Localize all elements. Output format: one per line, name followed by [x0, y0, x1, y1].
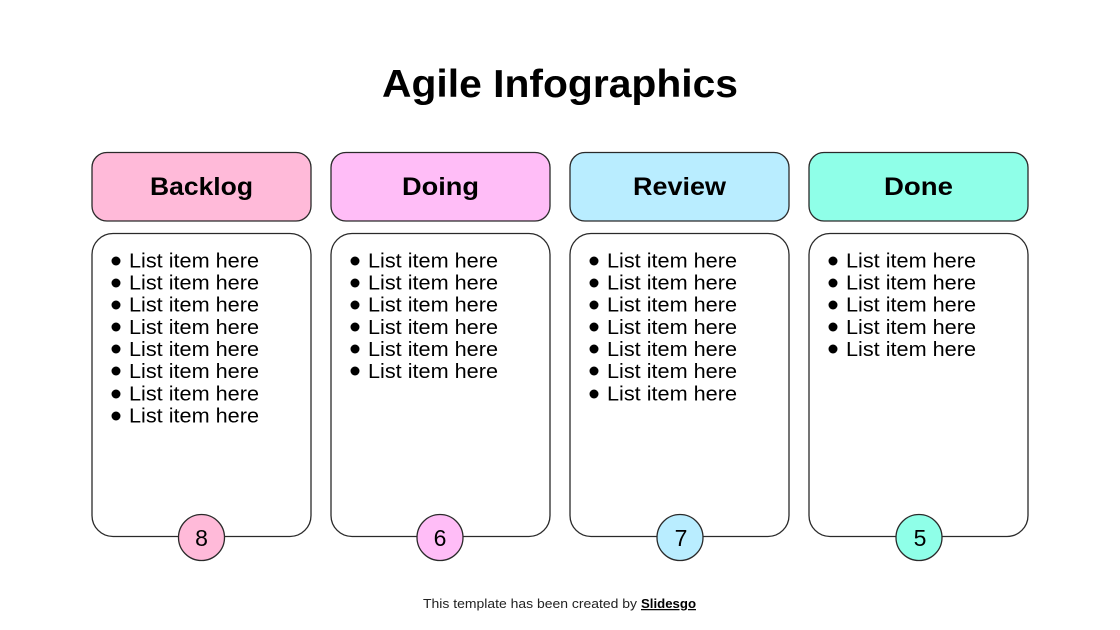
- card: doing list: List item here: [368, 273, 498, 295]
- card: doing list: [331, 234, 550, 536]
- header: backlog: [92, 152, 311, 221]
- card: doing list: List item here: [368, 339, 498, 361]
- card: doing list: List item here: [368, 295, 498, 317]
- count badge: 6: [417, 514, 463, 560]
- header: done: Done: [884, 173, 953, 201]
- card: backlog list: List item here: [129, 383, 259, 405]
- title: Agile Infographics: [382, 63, 738, 106]
- panel: backlog: [92, 152, 311, 560]
- card: done list: List item here: [846, 317, 976, 339]
- card: done list: [809, 234, 1028, 536]
- panel: doing: [331, 152, 550, 560]
- card: done list: List item here: [846, 339, 976, 361]
- header: review: Review: [633, 173, 727, 201]
- count badge: 6: 6: [434, 525, 446, 551]
- header: backlog: Backlog: [150, 173, 253, 201]
- card: doing list: List item here: [368, 250, 498, 272]
- count badge: 7: [657, 514, 703, 560]
- count badge: 7: 7: [675, 525, 687, 551]
- card: review list: List item here: [607, 273, 737, 295]
- card: done list: List item here: [846, 295, 976, 317]
- panel: review: [570, 152, 789, 560]
- card: done list: List item here: [846, 250, 976, 272]
- card: review list: [570, 234, 789, 536]
- card: backlog list: [92, 234, 311, 536]
- header: done: [809, 152, 1028, 221]
- footer credit: Slidesgo: [641, 597, 696, 611]
- card: review list: List item here: [607, 339, 737, 361]
- count badge: 8: [178, 514, 224, 560]
- card: review list: List item here: [607, 317, 737, 339]
- card: backlog list: List item here: [129, 361, 259, 383]
- card: doing list: List item here: [368, 317, 498, 339]
- card: review list: List item here: [607, 383, 737, 405]
- card: review list: List item here: [607, 361, 737, 383]
- card: backlog list: List item here: [129, 405, 259, 427]
- count badge: 8: 8: [195, 525, 208, 551]
- card: backlog list: List item here: [129, 295, 259, 317]
- count badge: 5: [896, 514, 942, 560]
- card: done list: List item here: [846, 273, 976, 295]
- card: review list: List item here: [607, 250, 737, 272]
- card: backlog list: List item here: [129, 273, 259, 295]
- count badge: 5: 5: [914, 525, 926, 551]
- card: doing list: List item here: [368, 361, 498, 383]
- footer credit: This template has been created by: [423, 597, 638, 611]
- card: backlog list: List item here: [129, 250, 259, 272]
- card: backlog list: List item here: [129, 339, 259, 361]
- card: backlog list: List item here: [129, 317, 259, 339]
- header: review: [570, 152, 789, 221]
- card: review list: List item here: [607, 295, 737, 317]
- panel: done: [809, 152, 1028, 560]
- header: doing: Doing: [402, 173, 479, 201]
- header: doing: [331, 152, 550, 221]
